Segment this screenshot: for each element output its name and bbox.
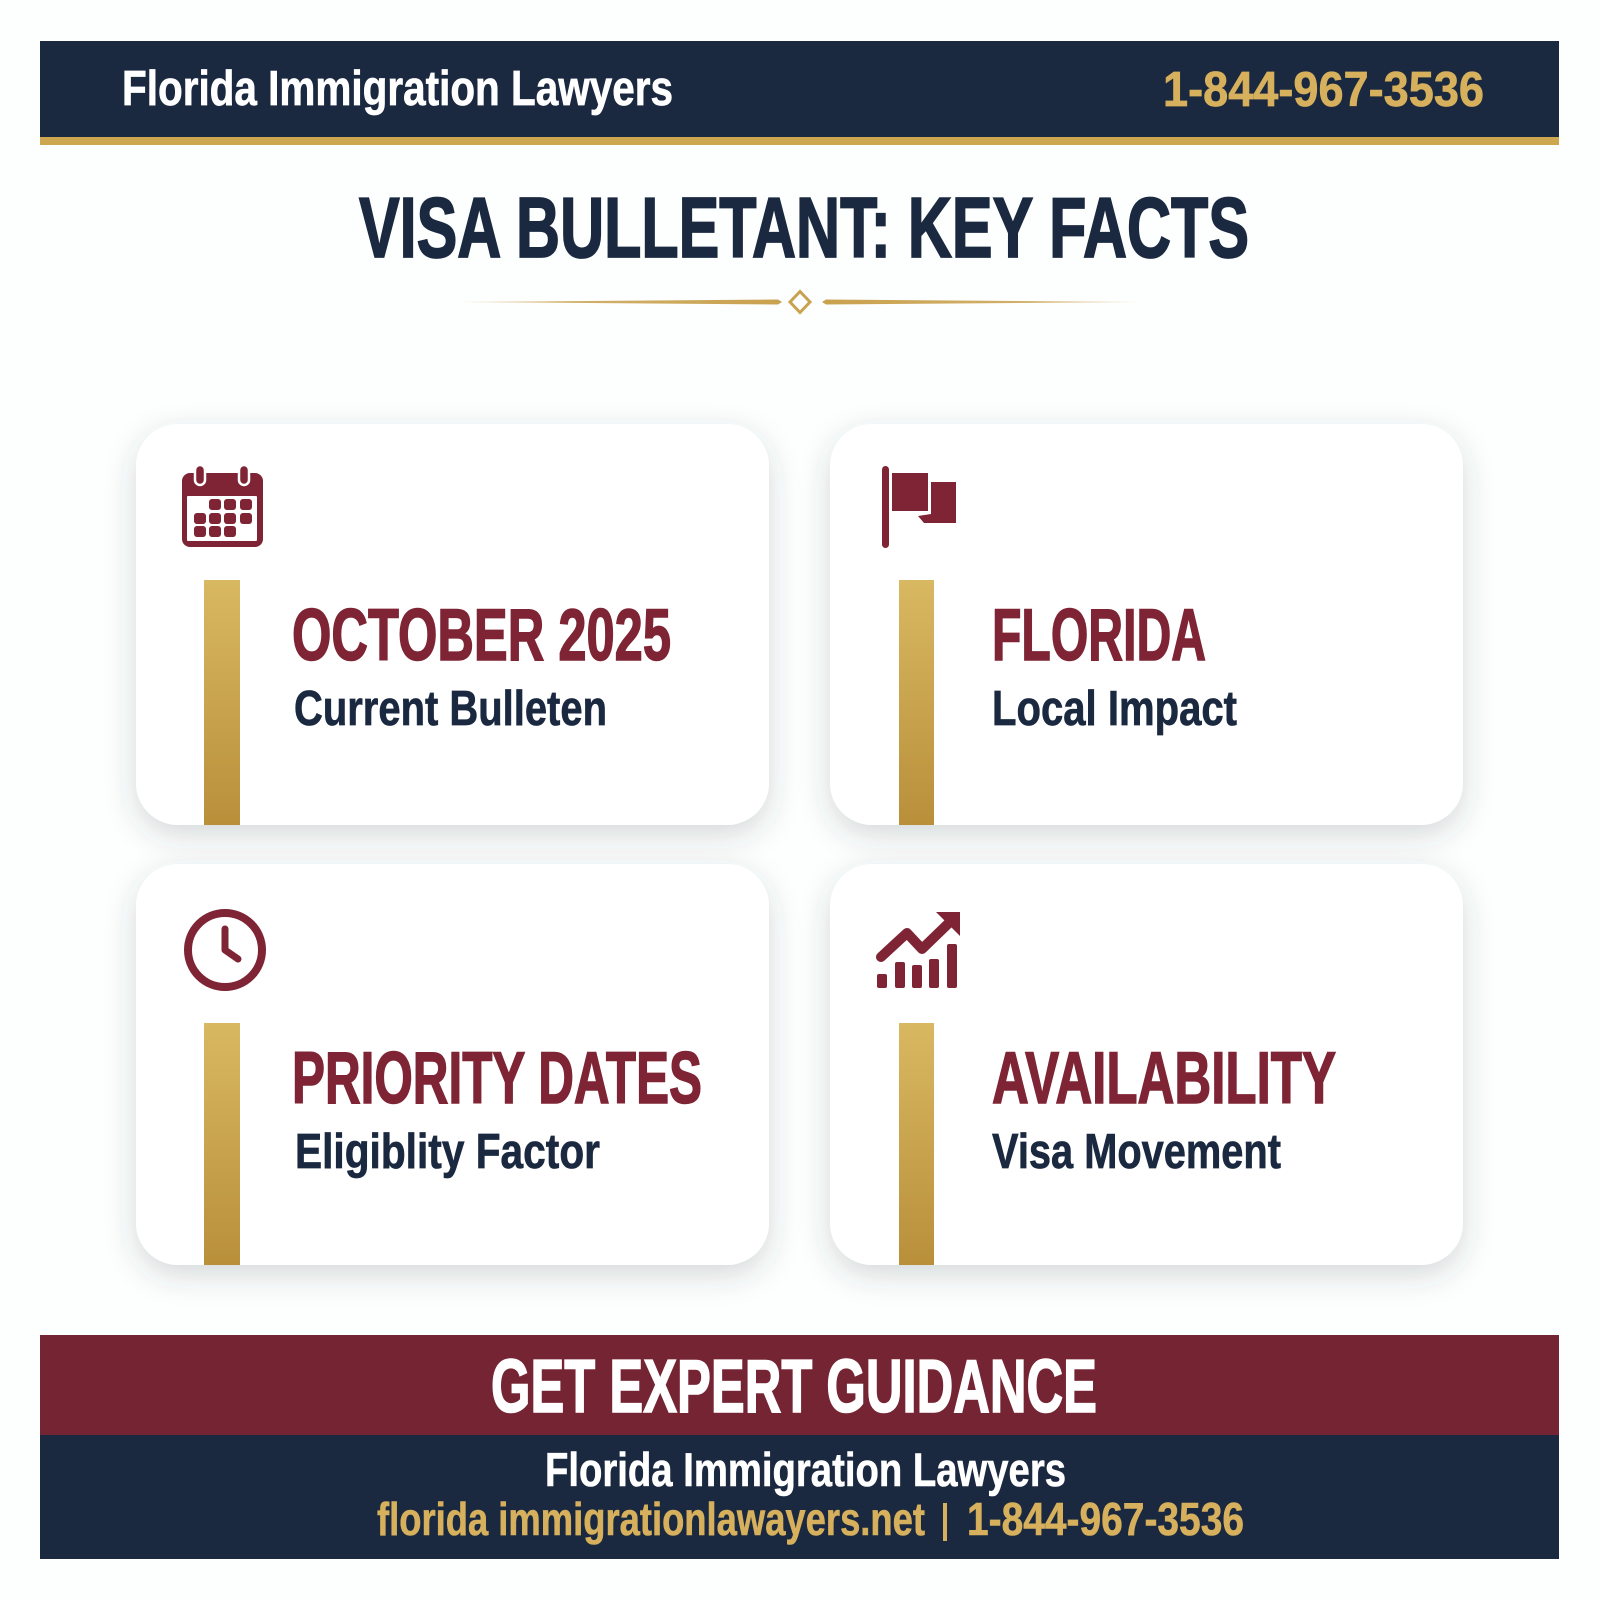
card heading: FLORIDA <box>992 595 1206 676</box>
footer phone number: 1-844-967-3536 <box>967 1493 1244 1545</box>
gold accent bar <box>204 580 240 825</box>
icon: rising chart <box>877 912 960 988</box>
card subheading: Visa Movement <box>992 1125 1281 1179</box>
icon: calendar <box>182 465 263 547</box>
card subheading: Eligiblity Factor <box>295 1125 600 1179</box>
header phone number: 1-844-967-3536 <box>1163 63 1484 117</box>
call-to-action band <box>40 1335 1559 1435</box>
footer separator <box>943 1503 947 1541</box>
footer firm name: Florida Immigration Lawyers <box>545 1443 1066 1496</box>
title: VISA BULLETANT: KEY FACTS <box>359 181 1249 276</box>
gold accent bar <box>204 1023 240 1265</box>
header banner <box>40 41 1559 145</box>
footer website: florida immigrationlawayers.net <box>377 1493 925 1545</box>
card subheading: Local Impact <box>992 682 1237 736</box>
card subheading: Current Bulleten <box>294 682 607 736</box>
panel: Priority Dates <box>136 864 769 1265</box>
card heading: AVAILABILITY <box>992 1038 1336 1119</box>
header firm name: Florida Immigration Lawyers <box>122 62 673 116</box>
title divider with diamond <box>457 292 1140 312</box>
gold accent bar <box>899 1023 934 1265</box>
panel: Availability <box>830 864 1463 1265</box>
footer contact band <box>40 1435 1559 1559</box>
call-to-action heading: GET EXPERT GUIDANCE <box>491 1344 1097 1428</box>
icon: clock <box>188 913 262 987</box>
icon: flag <box>882 466 956 548</box>
panel: October 2025 <box>136 424 769 825</box>
card heading: OCTOBER 2025 <box>292 595 671 676</box>
panel: Florida <box>830 424 1463 825</box>
gold accent bar <box>899 580 934 825</box>
card heading: PRIORITY DATES <box>292 1038 702 1119</box>
